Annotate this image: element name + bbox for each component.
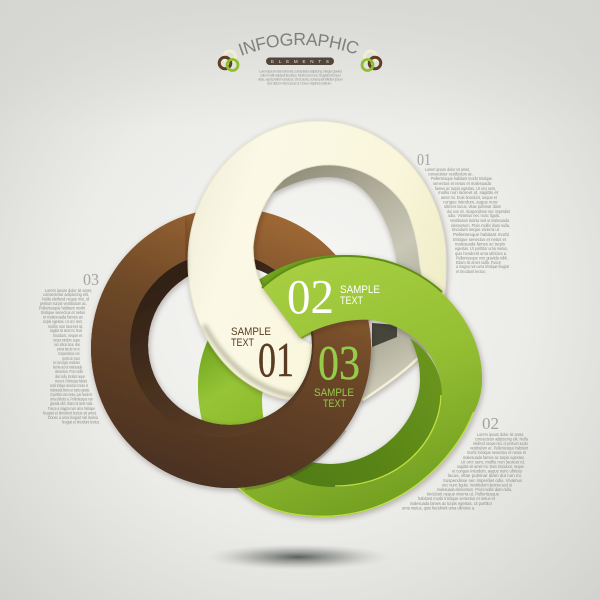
icon: left mini rings: [219, 51, 238, 70]
text block 03: nec nunc ligula. Vestibulum: [53, 360, 80, 365]
text block 01: amet mi. Duis tincidunt, neque et: [441, 195, 498, 200]
text block 03: et malesuada fames ac: [43, 314, 83, 320]
text block 01: Lorem ipsum dolor sit amet,: [425, 167, 470, 172]
text block 03: Pellentesque habitant morbi: [39, 306, 85, 310]
text block 02: tincidunt neque viverra ut. Pellentesque: [427, 492, 500, 496]
label 01: [231, 326, 294, 387]
brown ring, front layer: [91, 208, 371, 488]
text block 03: Donec a urna feugiat nisl lacinia: [48, 415, 99, 420]
text block 01: tristique senectus et netus et: [453, 237, 507, 242]
green band highlights: [222, 395, 474, 516]
side number 02: 02: [482, 414, 499, 433]
brown ring shadow on green: [245, 430, 345, 488]
text block 03: [39, 288, 100, 424]
text block 01: Pellentesque habitant morbi tristique: [431, 176, 493, 181]
cream lower edge shading: [204, 325, 303, 397]
label 01: 01: [258, 332, 294, 387]
text block 03: nunc ultrices lacus, vitae: [54, 342, 80, 347]
text block 01: [425, 167, 511, 274]
text block 03: feugiat et tincidunt lectus.: [62, 420, 100, 424]
text block 03: pretium turpis vestibulum ac.: [40, 301, 87, 306]
label 01: SAMPLE: [231, 326, 271, 338]
text block 02: malesuada elementum. Proin mollis diam nulla,: [437, 487, 512, 492]
text block 03: Nulla eleifend neque nisi, id: [42, 296, 90, 302]
text block 02: Ut orci sem, mollis non laoreet id,: [461, 460, 525, 464]
text block 01: senectus et netus et malesuada: [433, 181, 492, 186]
header description text: sed dictum nisl cursus ut. Donec dapibus pretium.: [267, 82, 332, 86]
text block 01: dui non mi. Suspendisse nec imperdiet: [447, 209, 511, 214]
text block 03: pulvinar diam dui non mi.: [57, 346, 80, 352]
label 01: TEXT: [231, 337, 254, 349]
text block 03: imperdiet odio. Vivamus: [62, 356, 80, 361]
text block 02: Lorem ipsum dolor sit amet,: [477, 432, 524, 437]
text block 03: Lorem ipsum dolor sit amet,: [45, 288, 92, 293]
text block 03: mollis non laoreet id,: [48, 324, 83, 329]
text block 02: sagittis sit amet mi. Duis tincidunt, neque: [457, 464, 525, 469]
text block 02: eleifend neque nisi, id pretium turpis: [473, 441, 528, 446]
text block 02: nec nunc ligula. Vestibulum lacinia sed ut: [442, 482, 513, 488]
cream ring inner wall: [188, 121, 446, 406]
text block 03: turpis egestas. Ut orci sem,: [43, 319, 83, 324]
text block 03: morbi tristique senectus et netus et: [50, 383, 89, 388]
text block 03: malesuada fames ac turpis egestas.: [50, 388, 90, 392]
text block 03: consectetur adipiscing elit.: [43, 292, 89, 297]
text block 01: Pellentesque habitant morbi: [453, 232, 509, 237]
header description text: [258, 70, 343, 86]
header description text: odio in velit volutpat faucibus. Morbi orci nunc, feugiat id tempor: [260, 74, 342, 78]
green ring, left section: [198, 255, 482, 517]
cream ring front face: [188, 121, 446, 401]
text block 03: tristique senectus et netus: [41, 310, 85, 315]
text block 01: Vestibulum lacinia sed ut malesuada: [450, 218, 510, 223]
brown ring, lower patch over green: [200, 365, 370, 488]
floor shadow: [206, 544, 390, 570]
text block 03: diam nulla, tincidunt neque: [55, 374, 85, 379]
text block 03: tincidunt, neque et: [53, 333, 83, 338]
label 03: SAMPLE: [314, 387, 354, 399]
text block 01: egestas. Ut porttitor urna metus,: [455, 246, 508, 251]
label 02: TEXT: [340, 295, 363, 307]
text block 01: fames ac turpis egestas. Ut orci sem,: [435, 186, 496, 191]
text block 03: congue interdum, augue: [53, 338, 80, 342]
text block 03: elementum. Proin mollis: [55, 369, 83, 374]
subtitle pill: [266, 58, 334, 65]
text block 02: [402, 432, 529, 510]
text block 02: vestibulum ac. Pellentesque habitant: [470, 446, 529, 450]
text block 03: sagittis sit amet mi. Duis: [50, 328, 82, 333]
text block 01: tincidunt neque viverra ut.: [452, 227, 500, 232]
label 02: SAMPLE: [340, 284, 380, 296]
text block 03: Suspendisse nec: [58, 351, 80, 356]
text block 01: quis hendrerit urna ultricies a.: [455, 251, 507, 256]
dark wedge under green band: [372, 323, 397, 347]
header description text: vitae, eget pretium at lacus. Ut et porta, consequat efficitur ipsum: [258, 78, 343, 82]
label 03: TEXT: [323, 398, 346, 410]
label 03: 03: [318, 335, 360, 390]
text block 01: Etiam sit amet nulla. Fusce: [456, 260, 502, 265]
text block 03: urna ultricies a. Pellentesque non: [50, 396, 94, 402]
subtitle pill: ELEMENTS: [271, 59, 329, 64]
text block 02: urna metus, quis hendrerit urna ultricies a.: [402, 506, 475, 510]
text block 03: lacinia sed ut malesuada: [53, 364, 82, 370]
label 02: 02: [287, 269, 334, 324]
icon: right mini rings: [362, 51, 381, 70]
side number 01: 01: [417, 150, 431, 169]
text block 01: consectetur vestibulum ac.: [428, 172, 473, 176]
text block 02: et congue interdum, augue nunc ultrices: [452, 468, 522, 474]
text block 01: mollis non laoreet id, sagittis et: [438, 190, 499, 195]
text block 03: Fusce a magna non urna tristique: [48, 406, 96, 411]
text block 01: ultrices lacus, vitae pulvinar diam: [444, 204, 502, 209]
text block 02: morbi tristique senectus et netus et: [467, 450, 527, 455]
title: curved heading: INFOGRAPHIC: [238, 32, 358, 56]
text block 01: odio. Vivamus nec nunc ligula.: [448, 213, 500, 218]
text block 01: congue interdum, augue nunc: [443, 200, 498, 204]
text block 03: Ut porttitor urna metus, quis hendrerit: [50, 392, 93, 397]
label 02: [287, 269, 380, 324]
green band top edge: [262, 256, 442, 292]
header description text: Lorem ipsum dolor sit amet, consectetur adipiscing. Integer gravida: [259, 70, 342, 74]
text block 03: gravida nibh. Etiam sit amet nulla.: [50, 401, 93, 406]
side number 03: 03: [83, 270, 99, 289]
cream lower rim highlight: [363, 352, 424, 400]
text block 03: viverra ut. Pellentesque habitant: [55, 378, 87, 384]
green band inner wall: [262, 338, 442, 487]
text block 03: feugiat et tincidunt lectus sit amet.: [43, 410, 97, 416]
text block 02: consectetur adipiscing elit. Nulla: [475, 436, 529, 442]
text block 01: a magna non uma tristique feugiat: [456, 264, 510, 269]
text block 02: Suspendisse nec imperdiet odio. Vivamus: [443, 478, 522, 483]
text block 01: elementum. Proin mollis diam nulla,: [451, 223, 510, 228]
label 03: [314, 335, 360, 410]
text block 01: malesuada fames ac turpis: [455, 242, 505, 246]
brown ring, back layer: [91, 208, 371, 488]
text block 01: et tincidunt lectus.: [456, 269, 486, 274]
text block 02: malesuada fames ac turpis egestas. Ut porttitor: [410, 501, 493, 506]
text block 02: lacus, vitae pulvinar diam dui non mi.: [448, 473, 522, 478]
cream ring: [188, 121, 446, 406]
green ring, front band: [222, 255, 482, 517]
green band face: [222, 255, 482, 517]
text block 02: habitant morbi tristique senectus et netus et: [418, 496, 496, 501]
text block 02: malesuada fames ac turpis egestas.: [463, 455, 525, 460]
text block 01: Pellentesque non gravida nibh.: [456, 256, 508, 260]
